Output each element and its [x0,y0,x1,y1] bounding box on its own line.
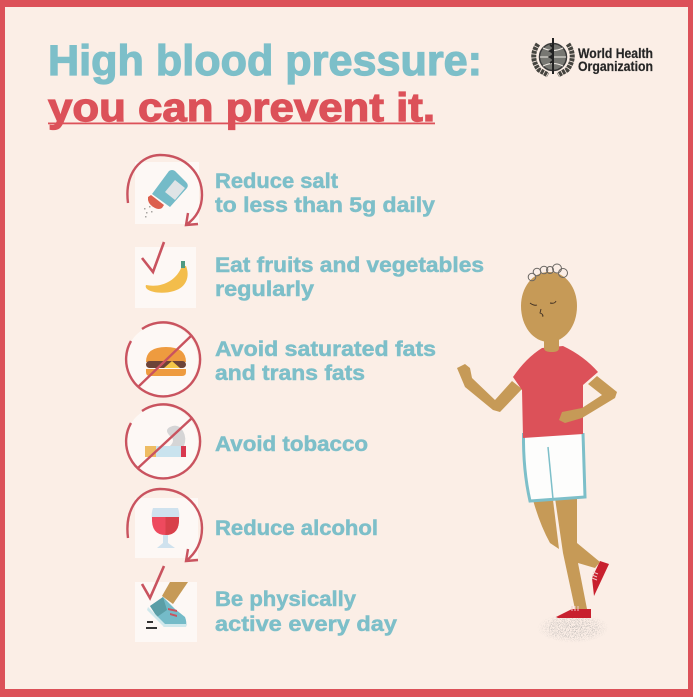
text: Be physically [215,588,356,611]
icon: salt shaker [135,162,199,224]
circular arrow [127,155,202,225]
check mark [142,242,164,272]
text: Avoid tobacco [215,433,368,456]
neck [544,335,559,352]
person illustration [457,264,617,643]
shorts [523,433,585,501]
text: Eat fruits and vegetables [215,254,484,277]
back leg [533,500,559,549]
head [521,272,577,342]
hair [528,264,568,281]
item: reduce salt [127,155,435,225]
text: regularly [215,278,314,301]
text [215,338,436,385]
item: saturated fats [126,322,436,396]
text: Reduce salt [215,170,338,193]
prohibition sign [126,322,200,396]
item: fruits and vegetables [135,242,484,308]
icon: burger [126,324,198,396]
WHO logo [534,38,653,75]
circular arrow [127,489,202,561]
right arm [559,376,617,423]
ground shadow [537,613,609,643]
icon: banana [135,247,196,308]
text: Avoid saturated fats [215,338,436,361]
text: Reduce alcohol [215,517,378,540]
text: active every day [215,613,397,636]
front shoe [556,606,591,618]
prohibition sign [126,404,200,478]
face [530,301,556,316]
item: tobacco [126,404,368,478]
icon: WHO emblem [534,38,572,75]
WHO name: World Health [578,46,653,61]
check mark [142,566,164,598]
text [215,254,484,301]
shirt [513,346,598,438]
title [48,37,482,130]
item: reduce alcohol [127,489,378,561]
text: to less than 5g daily [215,194,435,217]
back shoe [592,561,609,596]
icon: running shoe [135,582,197,642]
left arm [457,364,522,412]
WHO name [578,46,653,74]
WHO name: Organization [578,59,653,74]
item: physically active [135,566,397,642]
icon: cigarette [126,406,198,478]
icon: wine glass [135,498,198,558]
front leg [555,498,600,609]
title: you can prevent it. [48,86,435,130]
text [215,588,397,636]
text: and trans fats [215,362,365,385]
text [215,170,435,217]
title: High blood pressure: [48,37,482,85]
